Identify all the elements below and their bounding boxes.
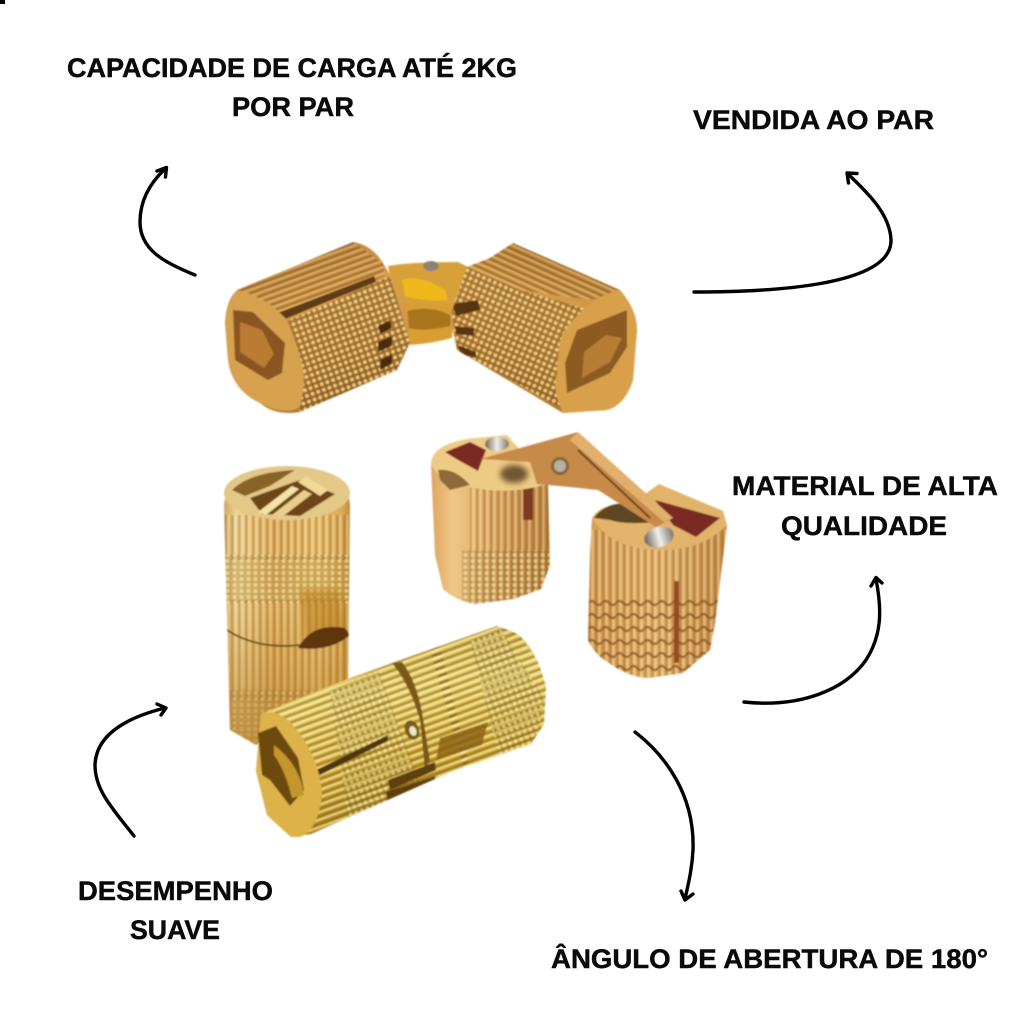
corner mark (0, 0, 5, 4)
left knurled cylinder (224, 241, 410, 414)
left copper cylinder top face (431, 435, 548, 491)
product: opened hinge top (220, 235, 640, 420)
left copper cylinder body (430, 464, 551, 605)
heading: desempenho suave: DESEMPENHO (78, 876, 273, 906)
product: open hinge with arm (428, 432, 730, 685)
lying cylinder body (256, 625, 548, 836)
heading: material de alta qualidade: QUALIDADE (781, 511, 947, 541)
arrow: to material de alta qualidade (744, 578, 882, 703)
lying cylinder end face (256, 712, 322, 837)
heading: material de alta qualidade: MATERIAL DE ALTA (732, 471, 998, 501)
arrow: to capacidade de carga (140, 168, 195, 275)
heading: capacidade de carga (67, 52, 517, 122)
product: closed hinge lying (250, 620, 550, 850)
heading: capacidade de carga: CAPACIDADE DE CARGA ATÉ 2KG (67, 52, 517, 83)
right copper cylinder top face (592, 484, 727, 551)
heading: desempenho suave: SUAVE (130, 915, 220, 945)
hinge arm (480, 432, 673, 527)
heading: vendida ao par: VENDIDA AO PAR (693, 105, 934, 135)
product: closed hinge standing (220, 465, 355, 750)
arrow: to vendida ao par (694, 173, 891, 292)
right knurled cylinder (445, 238, 640, 418)
heading: desempenho suave (78, 876, 273, 945)
standing cylinder top face (224, 466, 350, 520)
lying cylinder pin (402, 718, 422, 742)
standing cylinder body (223, 498, 352, 746)
arrow: to desempenho suave (95, 704, 166, 836)
heading: angulo de abertura: ÂNGULO DE ABERTURA DE 180° (551, 943, 988, 974)
arrow: to angulo de abertura (635, 732, 693, 900)
hinge centre links (388, 261, 470, 345)
heading: capacidade de carga: POR PAR (232, 92, 354, 122)
right copper cylinder body (585, 510, 730, 685)
heading: material de alta qualidade (732, 471, 998, 541)
left cylinder end face (225, 290, 304, 411)
right cylinder end face (555, 290, 637, 413)
